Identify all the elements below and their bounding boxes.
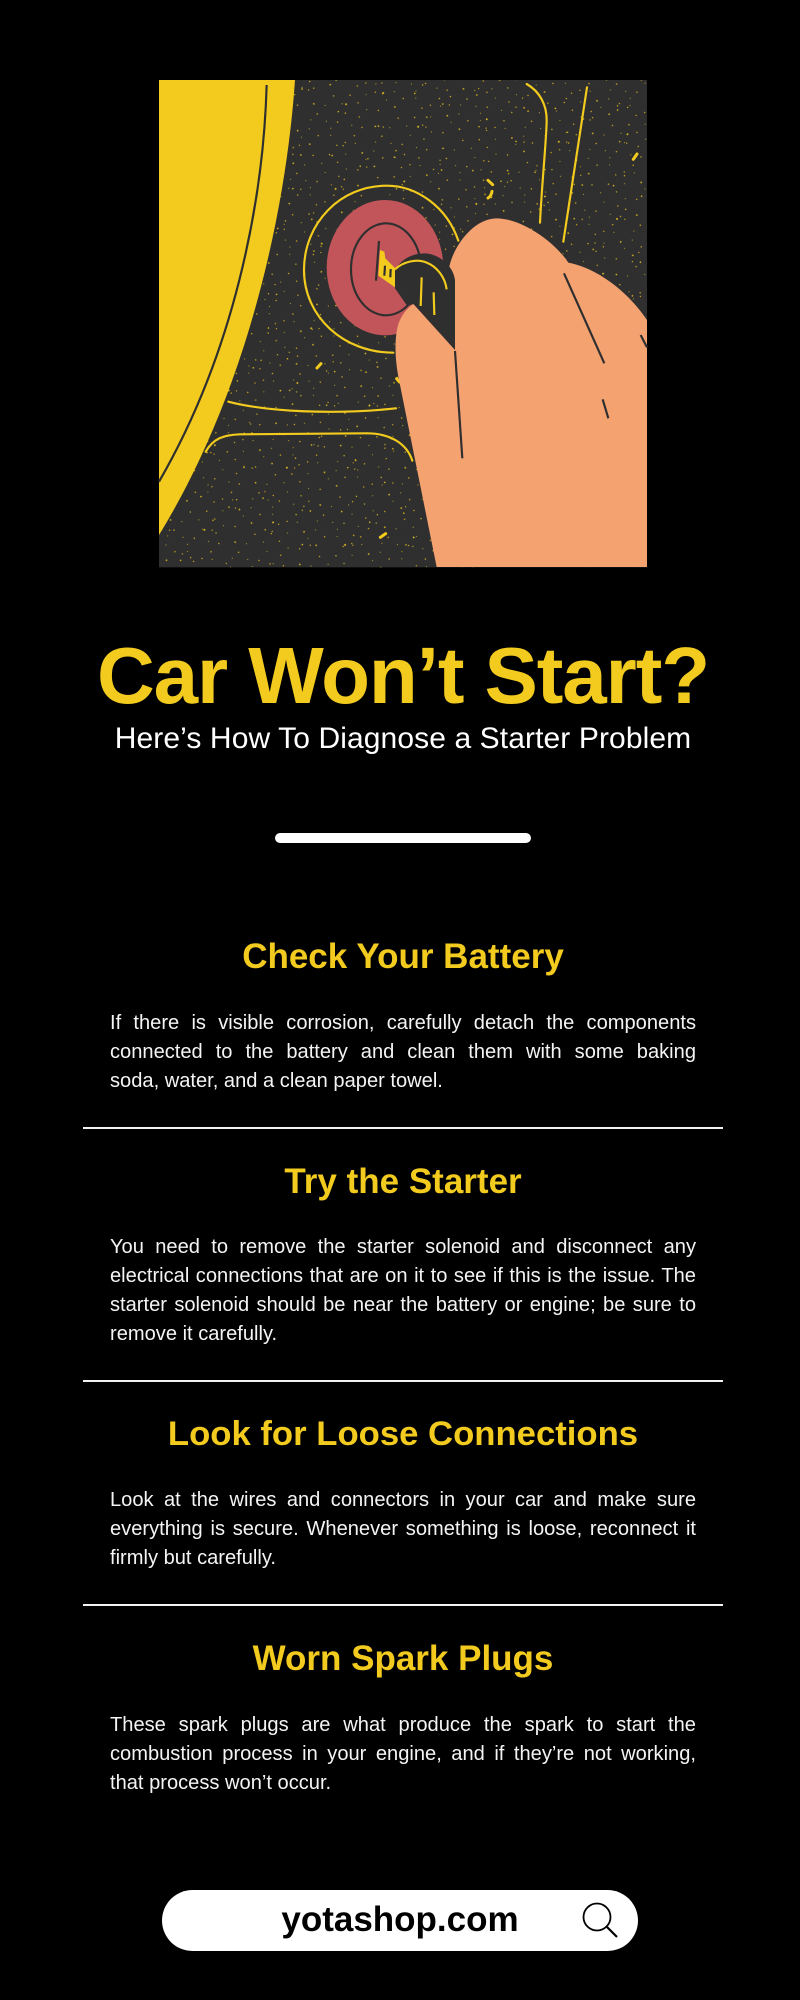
text block (110, 1714, 696, 1794)
text block: firmly but carefully. (110, 1547, 276, 1569)
seat seam line (159, 85, 267, 482)
text block: If there is visible corrosion, carefully detach the components (110, 1012, 696, 1034)
key head (395, 253, 455, 350)
text block: combustion process in your engine, and if they’re not working, (110, 1743, 696, 1765)
heading: Worn Spark Plugs (253, 1639, 553, 1678)
heading: Check Your Battery (242, 937, 564, 976)
panel: worn spark plugs (110, 1639, 696, 1794)
text block (110, 1489, 696, 1569)
key blade (376, 241, 395, 288)
ignition inner ring (351, 223, 421, 315)
title: Car Won’t Start? (97, 631, 709, 720)
yellow dabs (317, 154, 637, 537)
text block: These spark plugs are what produce the spark to start the (110, 1714, 696, 1736)
text block (110, 1236, 696, 1345)
website address: yotashop.com (281, 1900, 519, 1939)
car seat shape (159, 80, 295, 535)
text block: electrical connections that are on it to see if this is the issue. The (110, 1265, 696, 1287)
panel: try the starter (110, 1162, 696, 1345)
text block: remove it carefully. (110, 1323, 277, 1345)
website search bar (162, 1890, 638, 1951)
panel: look for loose connections (110, 1415, 696, 1569)
heading: Try the Starter (284, 1162, 522, 1200)
text block: connected to the battery and clean them with some baking (110, 1041, 696, 1063)
hand (396, 218, 647, 567)
text block: soda, water, and a clean paper towel. (110, 1070, 443, 1092)
text block: that process won’t occur. (110, 1772, 331, 1794)
dashboard lines (206, 84, 587, 461)
divider bar (275, 833, 531, 843)
text block: Look at the wires and connectors in your car and make sure (110, 1489, 696, 1511)
illustration background (159, 80, 647, 567)
text block: everything is secure. Whenever something is loose, reconnect it (110, 1518, 696, 1540)
text block (110, 1012, 696, 1092)
panel: check your battery (110, 937, 696, 1092)
speckle texture (159, 80, 647, 567)
icon: magnifying glass (582, 1902, 618, 1938)
text block: You need to remove the starter solenoid and disconnect any (110, 1236, 696, 1258)
illustration: finger turning car ignition key (158, 80, 648, 568)
text block: starter solenoid should be near the battery or engine; be sure to (110, 1294, 696, 1316)
ignition ring (327, 200, 443, 335)
heading: Look for Loose Connections (168, 1415, 638, 1453)
subtitle: Here’s How To Diagnose a Starter Problem (115, 722, 691, 755)
